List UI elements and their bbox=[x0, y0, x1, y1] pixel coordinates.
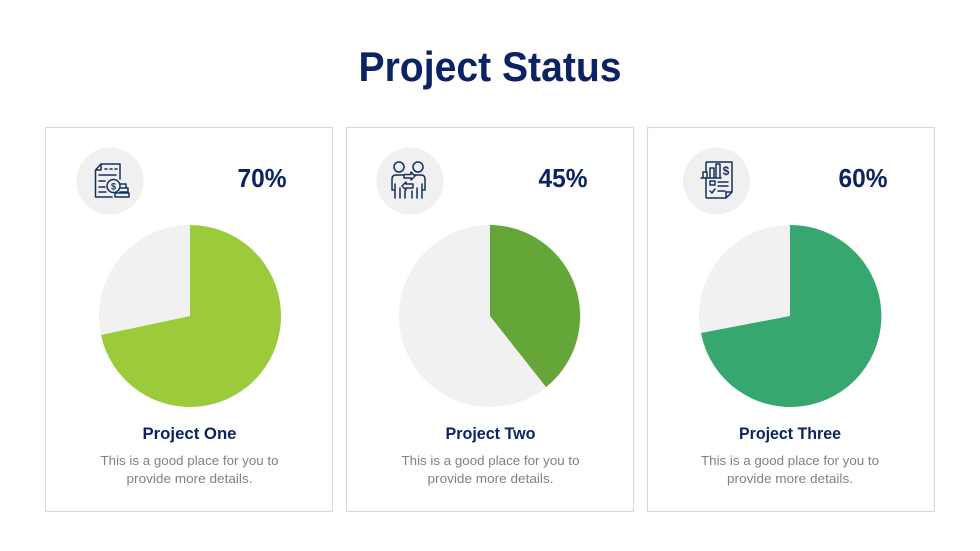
description: provide more details. bbox=[727, 471, 853, 486]
icon: financial report bbox=[683, 148, 750, 214]
percentage: 45% bbox=[538, 163, 588, 193]
title: Project Status bbox=[358, 43, 622, 90]
panel: project three bbox=[648, 128, 934, 512]
percentage: 60% bbox=[838, 163, 888, 193]
description bbox=[402, 453, 580, 486]
description: This is a good place for you to bbox=[701, 453, 879, 468]
description: provide more details. bbox=[428, 471, 554, 486]
pie chart: 60% bbox=[699, 225, 881, 407]
project name: Project Two bbox=[446, 424, 536, 443]
description: This is a good place for you to bbox=[402, 453, 580, 468]
pie chart: 70% bbox=[99, 225, 281, 407]
pie chart: 45% bbox=[399, 225, 581, 407]
icon: invoice with coins bbox=[76, 148, 144, 214]
icon: two people exchanging bbox=[376, 148, 444, 214]
description: This is a good place for you to bbox=[100, 453, 278, 468]
percentage: 70% bbox=[238, 163, 286, 193]
project name: Project Three bbox=[739, 424, 841, 443]
description: provide more details. bbox=[126, 471, 252, 486]
icon: financial report: $ bbox=[723, 164, 730, 178]
description bbox=[701, 453, 879, 486]
icon: invoice with coins: $ bbox=[111, 182, 116, 192]
panel: project two bbox=[346, 128, 634, 512]
description bbox=[100, 453, 278, 486]
project name: Project One bbox=[142, 424, 236, 443]
panel: project one bbox=[46, 128, 332, 512]
